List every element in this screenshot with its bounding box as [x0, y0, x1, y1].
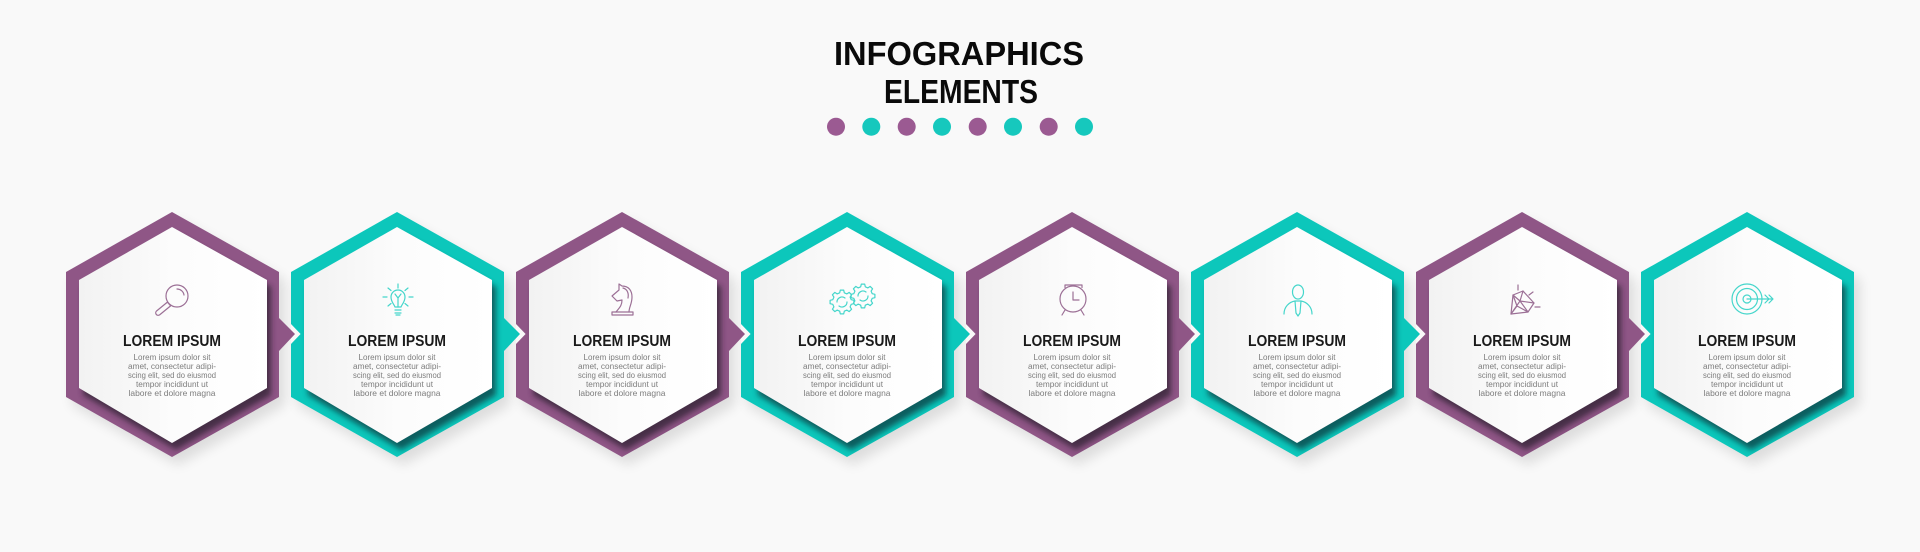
body text: tempor incididunt ut	[1036, 379, 1109, 389]
step 2 hexagon	[291, 212, 510, 465]
body text: Lorem ipsum dolor sit	[358, 352, 436, 362]
body text: amet, consectetur adipi-	[578, 361, 666, 371]
step 7 hexagon	[1416, 212, 1635, 465]
body text: labore et dolore magna	[1704, 388, 1791, 398]
body text	[1703, 352, 1791, 398]
body text: labore et dolore magna	[1254, 388, 1341, 398]
body text: Lorem ipsum dolor sit	[1258, 352, 1336, 362]
body text: tempor incididunt ut	[586, 379, 659, 389]
heading: LOREM IPSUM	[348, 333, 446, 350]
heading: LOREM IPSUM	[573, 333, 671, 350]
body text: amet, consectetur adipi-	[803, 361, 891, 371]
body text: amet, consectetur adipi-	[1028, 361, 1116, 371]
icon: gears	[830, 284, 875, 314]
title	[834, 35, 1084, 110]
title: INFOGRAPHICS	[834, 35, 1084, 72]
body text	[1028, 352, 1116, 398]
body text: amet, consectetur adipi-	[128, 361, 216, 371]
body text: labore et dolore magna	[804, 388, 891, 398]
arrow 2 to 3	[504, 318, 526, 351]
icon: magnifier	[156, 285, 188, 315]
body text: scing elit, sed do eiusmod	[1478, 370, 1566, 380]
body text	[578, 352, 666, 398]
body text: scing elit, sed do eiusmod	[803, 370, 891, 380]
body text: labore et dolore magna	[128, 388, 216, 398]
heading: LOREM IPSUM	[1248, 333, 1346, 350]
icon: diamond	[1511, 285, 1540, 314]
title: ELEMENTS	[884, 73, 1038, 110]
body text	[1478, 352, 1566, 398]
heading: LOREM IPSUM	[1023, 333, 1121, 350]
icon: target	[1732, 284, 1773, 314]
body text: amet, consectetur adipi-	[1253, 361, 1341, 371]
body text: tempor incididunt ut	[361, 379, 434, 389]
step 5 hexagon	[966, 212, 1185, 465]
arrow 4 to 5	[954, 318, 976, 351]
body text: tempor incididunt ut	[1486, 379, 1559, 389]
icon: alarm clock	[1060, 285, 1086, 315]
body text	[128, 352, 216, 398]
step 1 hexagon	[66, 212, 285, 465]
body text: labore et dolore magna	[1478, 388, 1566, 398]
icon: chess knight	[612, 284, 633, 315]
body text: scing elit, sed do eiusmod	[1253, 370, 1341, 380]
body text: tempor incididunt ut	[1261, 379, 1334, 389]
icon: light bulb	[383, 284, 413, 315]
body text: amet, consectetur adipi-	[353, 361, 441, 371]
step 3 hexagon	[516, 212, 735, 465]
step 8 hexagon	[1641, 212, 1860, 465]
arrow 1 to 2	[279, 318, 301, 351]
body text: scing elit, sed do eiusmod	[578, 370, 666, 380]
body text: Lorem ipsum dolor sit	[584, 352, 661, 362]
heading: LOREM IPSUM	[1473, 333, 1571, 350]
body text: tempor incididunt ut	[811, 379, 884, 389]
body text: scing elit, sed do eiusmod	[128, 370, 216, 380]
dots row	[827, 118, 1093, 136]
body text: amet, consectetur adipi-	[1703, 361, 1791, 371]
body text: scing elit, sed do eiusmod	[353, 370, 441, 380]
body text: Lorem ipsum dolor sit	[134, 352, 211, 362]
arrow 6 to 7	[1404, 318, 1426, 351]
body text: tempor incididunt ut	[136, 379, 209, 389]
body text: labore et dolore magna	[354, 388, 441, 398]
body text	[803, 352, 891, 398]
arrow 7 to 8	[1629, 318, 1651, 351]
body text: scing elit, sed do eiusmod	[1028, 370, 1116, 380]
arrow 3 to 4	[729, 318, 751, 351]
heading: LOREM IPSUM	[798, 333, 896, 350]
body text: labore et dolore magna	[578, 388, 666, 398]
body text	[1253, 352, 1341, 398]
heading: LOREM IPSUM	[1698, 333, 1796, 350]
arrow 5 to 6	[1179, 318, 1201, 351]
icon: person	[1284, 285, 1312, 316]
step 6 hexagon	[1191, 212, 1410, 465]
heading: LOREM IPSUM	[123, 333, 221, 350]
body text: Lorem ipsum dolor sit	[808, 352, 886, 362]
body text: Lorem ipsum dolor sit	[1708, 352, 1786, 362]
body text: labore et dolore magna	[1028, 388, 1116, 398]
body text	[353, 352, 441, 398]
body text: tempor incididunt ut	[1711, 379, 1784, 389]
body text: Lorem ipsum dolor sit	[1484, 352, 1561, 362]
step 4 hexagon	[741, 212, 960, 465]
body text: Lorem ipsum dolor sit	[1034, 352, 1111, 362]
body text: amet, consectetur adipi-	[1478, 361, 1566, 371]
body text: scing elit, sed do eiusmod	[1703, 370, 1791, 380]
